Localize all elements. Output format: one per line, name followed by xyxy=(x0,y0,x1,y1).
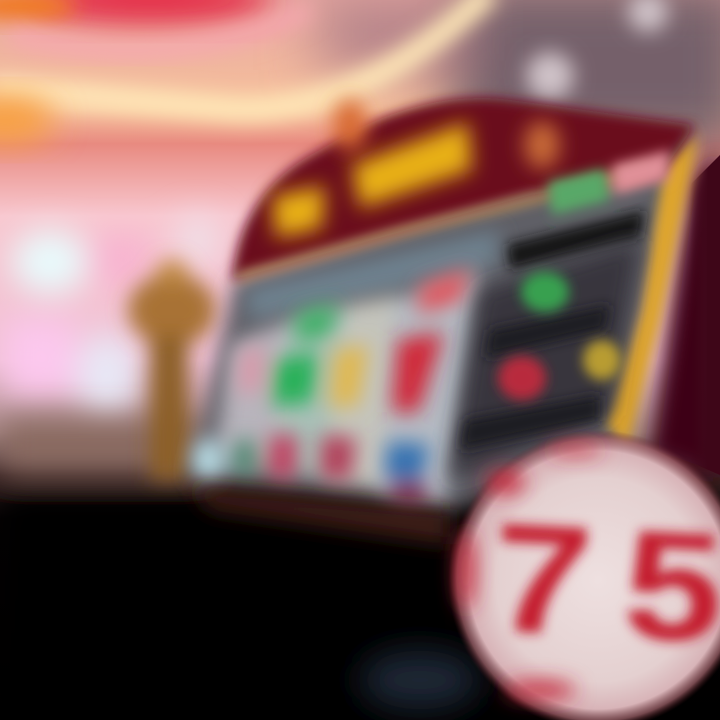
light: pink patch xyxy=(90,235,150,285)
marquee gold strip xyxy=(238,170,650,278)
light: red glow top left xyxy=(25,0,275,24)
upper right ceiling xyxy=(320,0,720,150)
marquee ornaments xyxy=(333,99,560,169)
background windows xyxy=(5,215,220,417)
floor glow blue xyxy=(360,650,480,710)
reel symbols xyxy=(192,268,470,510)
light: orange glow left xyxy=(0,96,55,144)
light: pale window right xyxy=(76,333,140,417)
marquee gold lettering xyxy=(272,122,472,238)
light: pink window xyxy=(5,320,75,395)
light: white spots xyxy=(526,0,668,100)
light: pink ring xyxy=(10,10,310,50)
ball body xyxy=(440,428,720,720)
machine base xyxy=(190,485,450,545)
lottery ball xyxy=(440,428,720,720)
machine body xyxy=(190,130,690,510)
reels xyxy=(215,270,480,505)
control panel xyxy=(450,240,640,480)
light: orange glow far left xyxy=(0,0,75,22)
marquee right colored panels xyxy=(505,150,670,270)
yellow side frame xyxy=(606,135,698,445)
control buttons xyxy=(498,272,621,400)
marquee arch xyxy=(232,98,695,280)
slot machine xyxy=(190,98,720,545)
glass top blue band xyxy=(245,230,500,320)
right cabinet dark curtain xyxy=(650,150,720,480)
light: pale patch xyxy=(176,215,220,265)
crowd silhouette xyxy=(0,420,460,720)
control panel dark strips xyxy=(460,305,610,450)
light: neon arc xyxy=(0,0,490,110)
ball red patches xyxy=(457,445,603,699)
ceiling lights xyxy=(0,0,668,144)
light: pale blue window xyxy=(12,230,88,294)
trophy figure xyxy=(128,260,216,480)
